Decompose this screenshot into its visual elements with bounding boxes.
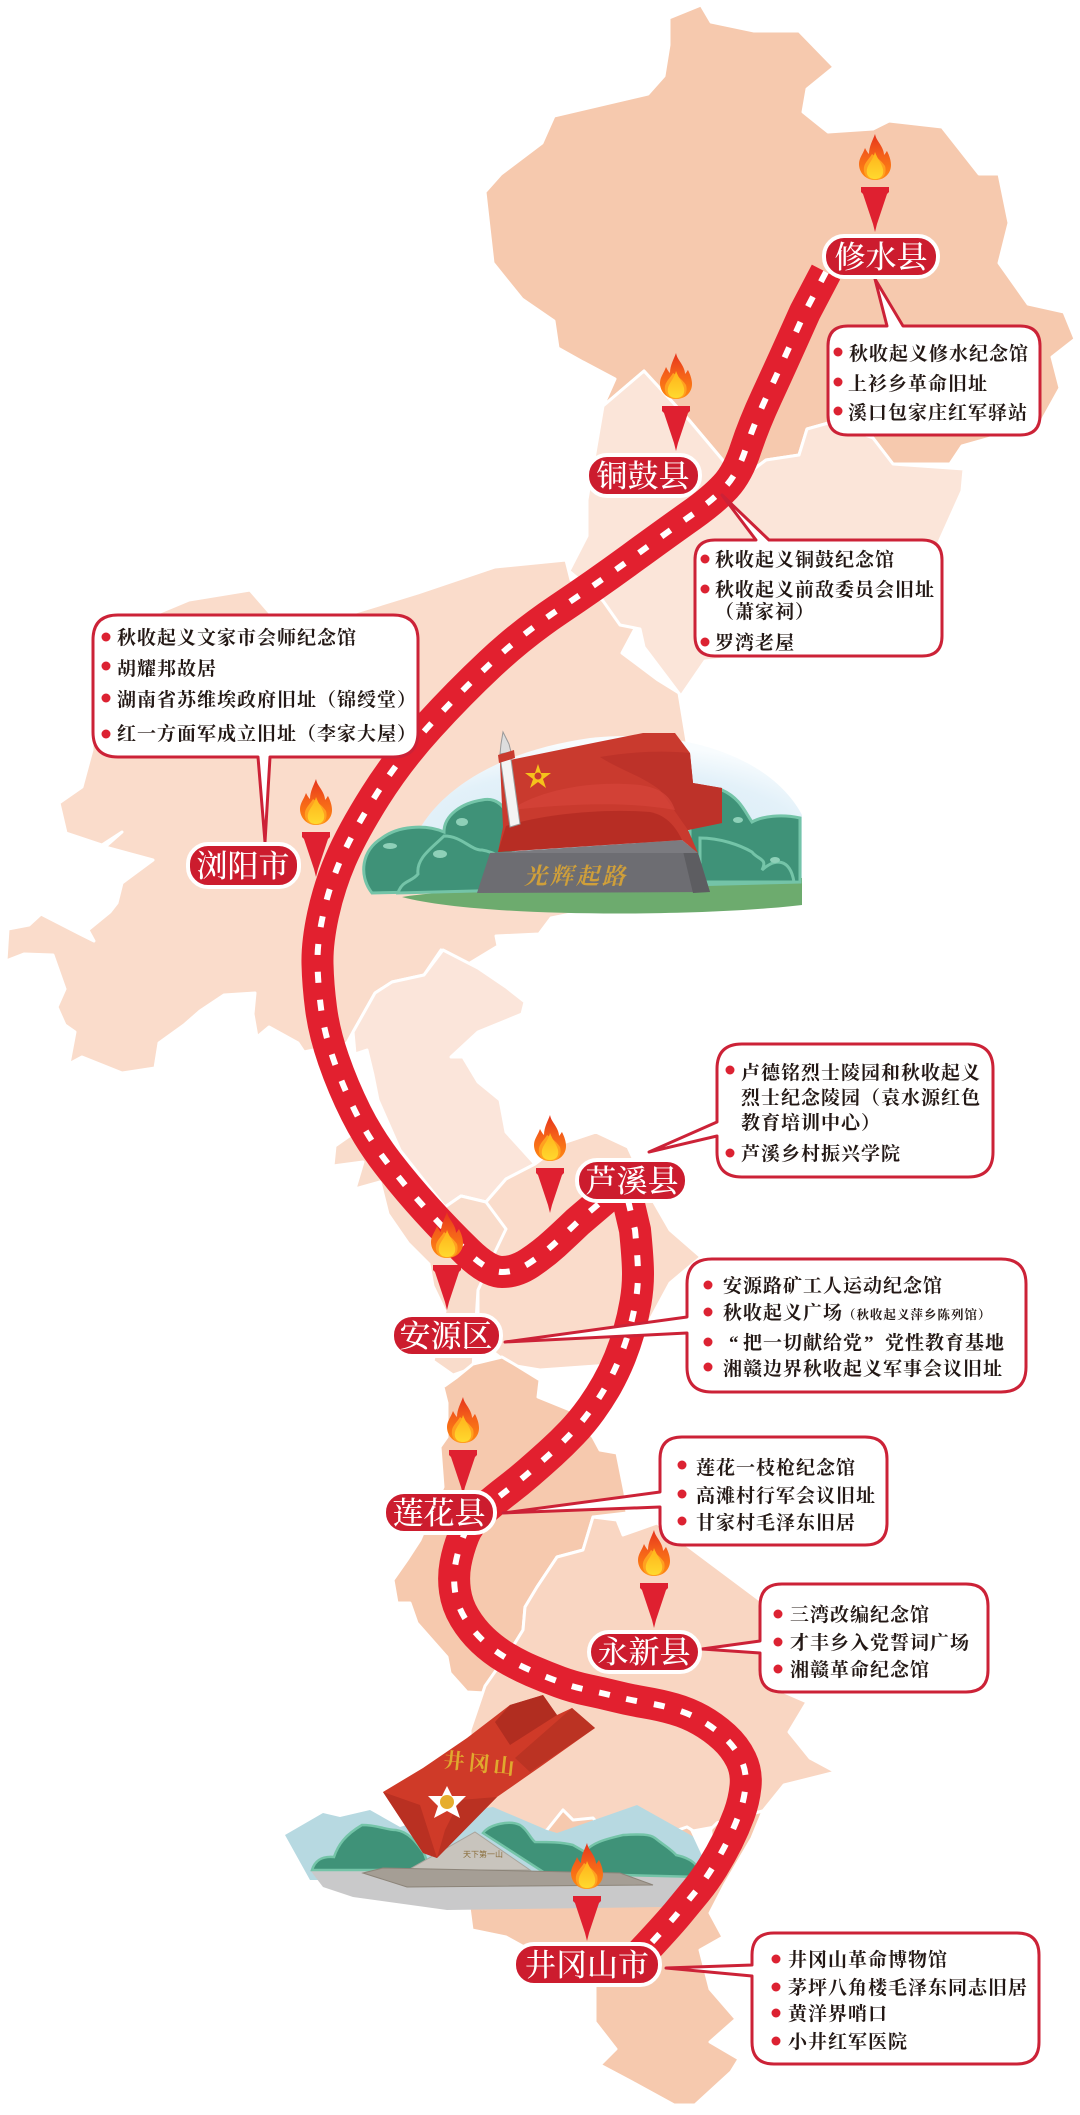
region: Lianhua	[393, 1357, 627, 1693]
region: Jinggangshan	[469, 1810, 763, 2105]
label: Jinggangshan: 井冈山市	[525, 1948, 649, 1983]
site list: 秋收起义广场（秋收起义萍乡陈列馆）	[723, 1303, 992, 1324]
site list: 把一切献给党	[743, 1331, 863, 1354]
callout: Luxi sites	[649, 1044, 993, 1177]
callout: Xiushui sites	[828, 279, 1040, 435]
pyramid inscription: 天下第一山	[463, 1849, 503, 1859]
label: Liuyang	[188, 844, 299, 887]
site list: 黄洋界哨口	[788, 2003, 888, 2025]
region: Tonggu	[569, 371, 964, 696]
illustration: autumn harvest flag monument	[364, 732, 802, 914]
region: Liuyang	[6, 560, 700, 1073]
stone base	[477, 840, 710, 893]
site list: 湖南省苏维埃政府旧址（锦绶堂）	[117, 688, 417, 711]
torch: Tonggu	[660, 353, 692, 451]
site list: 井冈山革命博物馆	[788, 1948, 948, 1971]
callout: Yongxin sites	[702, 1584, 988, 1692]
region: Yongxin	[470, 1517, 836, 1860]
ground	[402, 878, 802, 914]
torch: Anyuan	[431, 1212, 463, 1310]
region: Xiushui	[485, 5, 1075, 469]
site list: 党性教育基地	[885, 1332, 1005, 1354]
label: Xiushui: 修水县	[834, 240, 928, 275]
base inscription: 光辉起路	[524, 864, 628, 889]
torch: Lianhua	[447, 1397, 479, 1495]
site list: 秋收起义前敌委员会旧址	[715, 578, 935, 601]
stone platform	[363, 1868, 653, 1887]
red flag	[498, 733, 722, 853]
callout: Lianhua sites	[503, 1437, 887, 1545]
site list: 教育培训中心）	[741, 1112, 881, 1134]
ground	[310, 1870, 703, 1910]
site list: 烈士纪念陵园（袁水源红色	[741, 1086, 981, 1109]
road surface	[317, 272, 826, 1955]
pyramid	[408, 1832, 530, 1870]
site list: 小井红军医院	[788, 2031, 908, 2053]
obelisk	[498, 732, 520, 827]
white star	[428, 1786, 466, 1818]
torch: Xiushui	[859, 134, 891, 232]
mountains	[285, 1805, 710, 1880]
site list: 卢德铭烈士陵园和秋收起义	[741, 1061, 981, 1084]
torch: Luxi	[534, 1115, 566, 1213]
site list: 高滩村行军会议旧址	[696, 1484, 876, 1507]
site list: ”	[864, 1333, 874, 1354]
red flag	[383, 1695, 595, 1858]
site list: 湘赣边界秋收起义军事会议旧址	[723, 1357, 1003, 1380]
callout: Jinggangshan sites	[666, 1933, 1039, 2064]
sky backdrop	[405, 736, 802, 885]
site list: 秋收起义文家市会师纪念馆	[117, 626, 357, 649]
torch: Yongxin	[638, 1530, 670, 1628]
site list: 罗湾老屋	[715, 632, 795, 654]
site list: 才丰乡入党誓词广场	[790, 1631, 970, 1654]
label: Luxi: 芦溪县	[586, 1164, 678, 1199]
site list: 三湾改编纪念馆	[790, 1603, 930, 1626]
trees right	[690, 790, 800, 885]
site list: “	[729, 1333, 740, 1354]
site list: 上衫乡革命旧址	[848, 372, 988, 395]
torches	[300, 134, 891, 1941]
trees left	[364, 799, 515, 893]
label: Yongxin: 永新县	[598, 1635, 690, 1670]
road dashes	[317, 272, 826, 1955]
star	[525, 764, 551, 788]
site list: 莲花一枝枪纪念馆	[696, 1456, 856, 1479]
torch: Jinggangshan	[571, 1843, 603, 1941]
site list: 湘赣革命纪念馆	[790, 1658, 930, 1681]
label: Xiushui	[824, 236, 938, 277]
site list: 安源路矿工人运动纪念馆	[723, 1274, 943, 1297]
callout: Tonggu sites	[695, 495, 942, 656]
label: Lianhua: 莲花县	[392, 1496, 486, 1531]
label: Anyuan: 安源区	[400, 1319, 492, 1354]
flag inscription: 井冈山	[442, 1748, 520, 1780]
region: Shangli	[353, 950, 535, 1207]
site list: 溪口包家庄红军驿站	[848, 401, 1028, 424]
haze beside road	[690, 1826, 716, 1892]
site list: 芦溪乡村振兴学院	[741, 1142, 901, 1165]
region: Anyuan	[333, 1125, 506, 1375]
label: Liuyang: 浏阳市	[196, 849, 290, 884]
site list: 红一方面军成立旧址（李家大屋）	[117, 722, 417, 745]
label: Tonggu: 铜鼓县	[596, 459, 690, 494]
illustration: Jinggangshan monument	[285, 1695, 716, 1910]
site list: 甘家村毛泽东旧居	[696, 1511, 856, 1534]
site list: （萧家祠）	[715, 600, 815, 623]
torch: Liuyang	[300, 779, 332, 877]
region: Luxi	[445, 1132, 701, 1370]
site list: 胡耀邦故居	[117, 658, 217, 680]
trees	[312, 1823, 700, 1877]
site list: 秋收起义铜鼓纪念馆	[715, 548, 895, 571]
callout: Liuyang sites	[93, 615, 418, 842]
route road	[317, 272, 826, 1955]
site list: 茅坪八角楼毛泽东同志旧居	[788, 1977, 1028, 1999]
callout: Anyuan sites	[505, 1259, 1026, 1392]
site list: 秋收起义修水纪念馆	[849, 342, 1029, 365]
